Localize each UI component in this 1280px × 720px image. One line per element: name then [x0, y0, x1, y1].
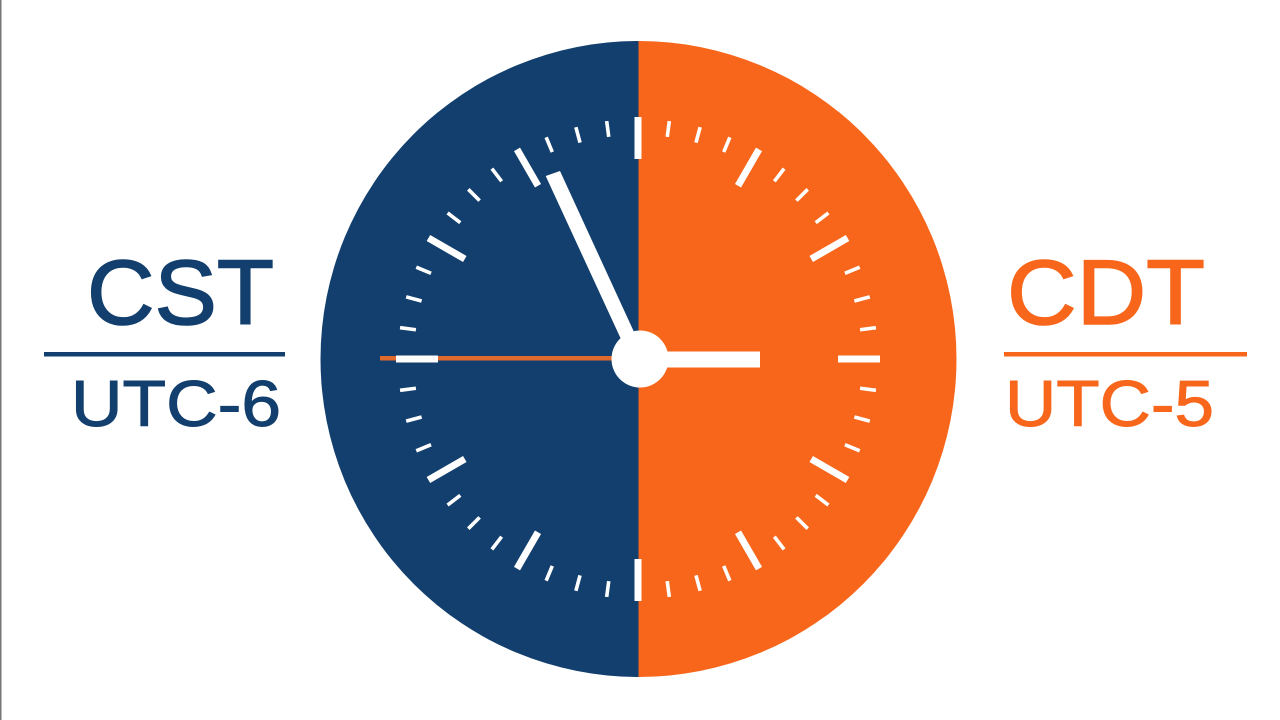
hour hand — [640, 352, 760, 368]
panel: CDT label — [1004, 242, 1247, 440]
clock face: orange half — [638, 41, 956, 677]
heading: CST: CST — [87, 242, 274, 344]
minute hand — [546, 171, 640, 350]
clock — [320, 41, 956, 677]
center hub — [612, 330, 668, 388]
text: UTC-5: UTC-5 — [1005, 367, 1214, 440]
divider line: CST — [44, 352, 285, 356]
divider line: CDT — [1004, 352, 1247, 356]
second hand — [380, 356, 615, 360]
hour ticks — [396, 117, 880, 601]
clock face: navy half — [320, 41, 638, 677]
minor ticks — [400, 121, 876, 597]
heading: CDT: CDT — [1007, 242, 1205, 344]
panel: CST label — [44, 242, 285, 440]
text: UTC-6: UTC-6 — [71, 367, 281, 440]
